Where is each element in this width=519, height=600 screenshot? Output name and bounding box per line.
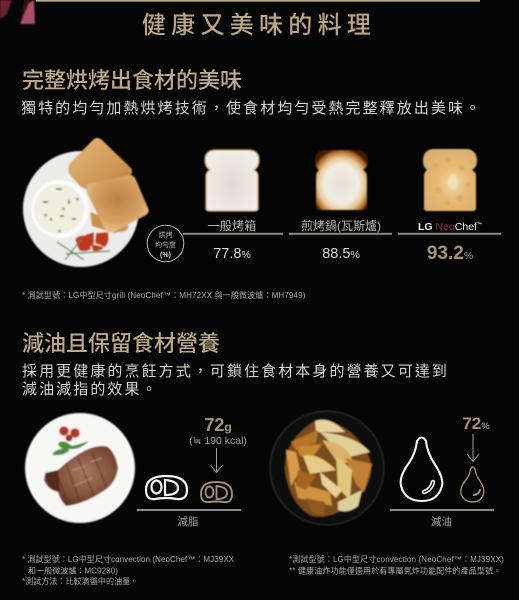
- value: LG NeoChef: 93.2%: [427, 243, 473, 264]
- label: fat reduction: 減脂: [178, 515, 198, 528]
- toast: LG NeoChef: [423, 149, 477, 211]
- badge: baking uniformity: (%): [160, 252, 171, 259]
- footnote: baking test: * 測試型號：LG中型尺寸grill (NeoChef™：MH72XX 與一般微波爐：MH7949): [22, 290, 306, 300]
- decorative red leaf corner: [0, 0, 35, 24]
- section heading: oil reduction: 減油且保留食材營養: [22, 331, 220, 356]
- tomatoes: [75, 232, 109, 251]
- footnotes: oil: ** 健康油炸功能僅適用於有專屬氣炸功能配件的產品型號。: [289, 566, 501, 576]
- grill marks: [58, 452, 106, 504]
- divider: oil: [390, 509, 494, 511]
- steak dark end: [45, 470, 60, 492]
- footnotes: fat: *測試方法：比較滴盤中的油量。: [22, 576, 138, 586]
- footnotes: fat: 和一般微波爐：MC9280): [28, 566, 118, 576]
- section description: oil reduction: 採用更健康的烹飪方式，可鎖住食材本身的營養又可達到: [22, 362, 449, 380]
- badge: baking uniformity: 烘烤: [158, 230, 172, 239]
- value: griddle pan: 88.5%: [322, 246, 360, 262]
- label: oil reduction: 減油: [431, 515, 452, 528]
- label: LG NeoChef logo: LG NeoChef: [418, 221, 477, 233]
- footnotes: fat: [22, 554, 235, 586]
- top gold rule: [36, 0, 480, 2]
- lower crust: [90, 212, 129, 233]
- dip: [34, 184, 84, 234]
- label: griddle pan: 煎烤鍋(瓦斯爐): [301, 218, 381, 233]
- herb leaves: [52, 441, 89, 455]
- icon: meat before: [146, 476, 187, 499]
- badge: baking uniformity: 均勻度: [155, 240, 176, 249]
- section description: second line: 減油減指的效果。: [22, 381, 159, 398]
- badge: baking uniformity: [147, 225, 184, 262]
- food photo: steak plate: [25, 413, 135, 523]
- footnotes: oil: [289, 554, 504, 576]
- section heading: baking: 完整烘烤出食材的美味: [22, 68, 242, 93]
- steak: [44, 446, 118, 506]
- arrow: oil: [467, 434, 479, 462]
- comparison divider bars: [183, 233, 501, 235]
- arrow: fat: [210, 448, 222, 472]
- food photo: potato wedges in black bowl: [270, 411, 384, 525]
- tomatoes: [59, 426, 69, 436]
- toast: griddle pan: [315, 150, 368, 210]
- plate: [25, 413, 135, 523]
- front toast: [86, 175, 149, 233]
- value: regular oven: 77.8%: [213, 246, 251, 262]
- title: 健康又美味的料理: [142, 12, 376, 39]
- section description: baking: 獨特的均勻加熱烘烤技術，使食材均勻受熱完整釋放出美味。: [21, 100, 482, 117]
- divider: fat: [137, 509, 241, 511]
- value: oil reduced: 72%: [462, 414, 490, 433]
- dip bowl: [31, 180, 89, 238]
- label: regular oven: 一般烤箱: [207, 218, 257, 233]
- value: fat reduced: 72g: [204, 415, 232, 435]
- food photo: toast plate with dip: [23, 138, 149, 267]
- footnotes: fat: * 測試型號：LG中型尺寸convection (NeoChef™：MJ39XX: [22, 554, 235, 564]
- value: calories: (≒ 190 kcal): [189, 435, 247, 447]
- icon: oil drop before: [401, 438, 442, 501]
- plate: [23, 151, 139, 267]
- toast: regular oven: [205, 150, 259, 211]
- icon: oil drop after: [461, 467, 484, 502]
- icon: meat after: [201, 482, 232, 502]
- bowl: [270, 411, 384, 525]
- wedge base: [285, 421, 371, 517]
- label: LG NeoChef logo: ™: [477, 222, 482, 228]
- footnotes: oil: *測試型號：LG中型尺寸convection (NeoChef™：MJ39XX): [289, 554, 504, 564]
- wedges: [315, 420, 345, 432]
- back toast: [68, 138, 132, 190]
- chives: [57, 238, 110, 260]
